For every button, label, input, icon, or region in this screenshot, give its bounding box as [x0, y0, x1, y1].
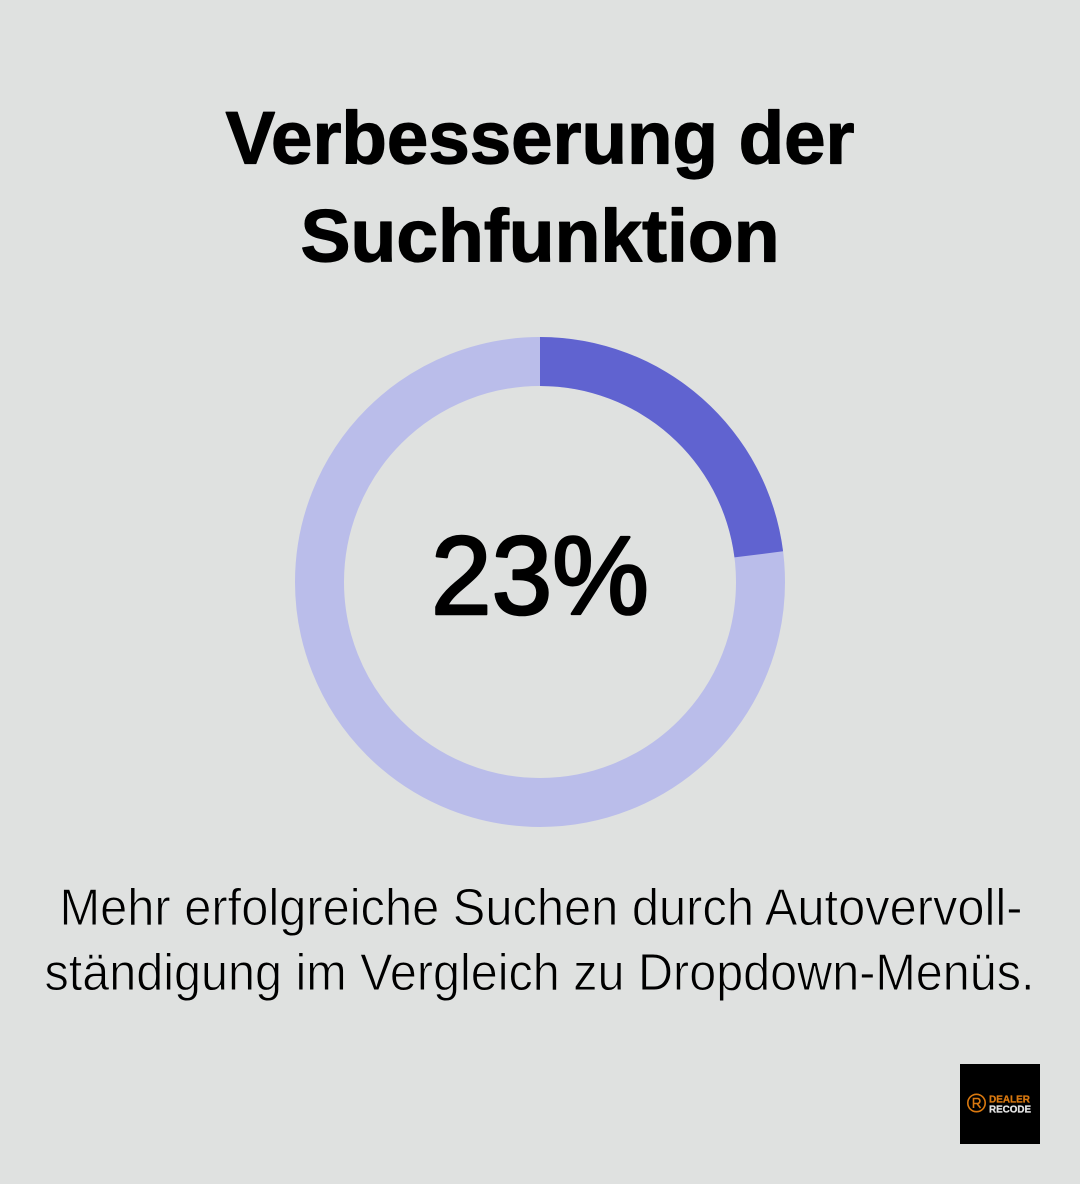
title: Verbesserung der — [226, 96, 854, 180]
logo wordmark: DEALER — [989, 1094, 1031, 1106]
center value: 23% — [431, 514, 649, 638]
logo: Dealer Recode — [960, 1064, 1040, 1144]
logo background — [960, 1064, 1040, 1144]
description text: Mehr erfolgreiche Suchen durch Autovervoll- — [60, 879, 1022, 937]
description text — [44, 879, 1034, 1002]
title: Suchfunktion — [300, 194, 780, 278]
logo icon — [968, 1094, 985, 1112]
donut track — [320, 362, 760, 802]
donut chart: 23 percent — [320, 337, 783, 802]
logo: Dealer Recode: RECODE — [989, 1104, 1031, 1116]
donut highlighted segment — [540, 337, 783, 557]
title — [226, 96, 854, 278]
description text: ständigung im Vergleich zu Dropdown-Menüs. — [44, 944, 1034, 1002]
